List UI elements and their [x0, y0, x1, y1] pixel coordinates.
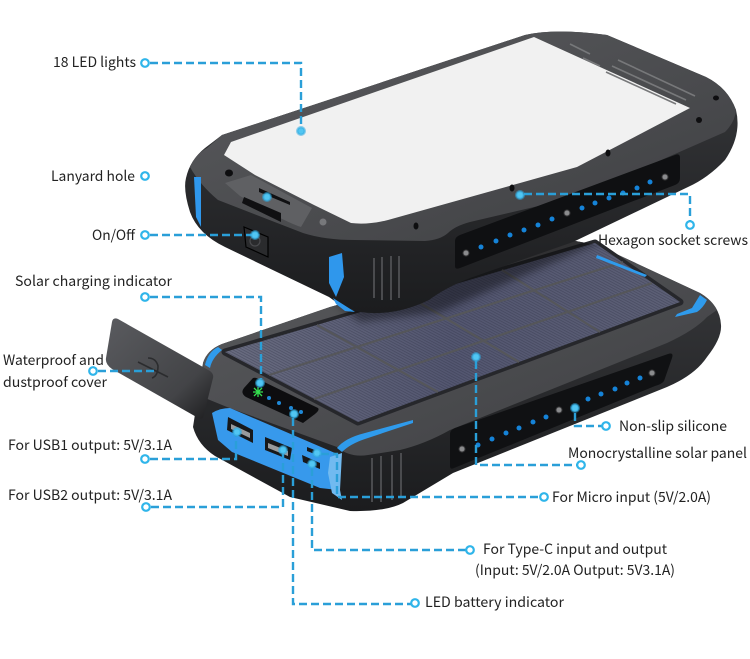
on/off button — [244, 227, 268, 257]
blue corner accents — [205, 255, 707, 452]
blue side accents — [194, 177, 355, 312]
callout: waterproof and dustproof cover — [3, 350, 157, 392]
LED display window — [242, 378, 319, 423]
callout: 18 LED lights: 18 LED lights — [53, 52, 136, 72]
hexagon socket screw holes — [225, 96, 719, 230]
USB symbol on flap — [138, 358, 168, 378]
solar indicator green light — [253, 387, 263, 397]
callout: non-slip silicone: Non-slip silicone — [619, 416, 727, 436]
lower body — [193, 240, 721, 511]
rating label printing — [570, 44, 695, 104]
callout: USB1 output: For USB1 output: 5V/3.1A — [8, 435, 172, 455]
callout: type-C input and output: (Input: 5V/2.0A Output: 5V3.1A) — [475, 560, 675, 580]
callout: waterproof and dustproof cover: Waterproof and — [3, 350, 104, 370]
callout: on/off — [92, 225, 259, 245]
waterproof cover flap — [106, 318, 213, 419]
callout: hexagon socket screws — [516, 191, 748, 250]
white LED light panel — [224, 37, 690, 224]
callout: solar charging indicator — [15, 271, 264, 387]
callout: type-C input and output — [308, 460, 675, 580]
lanyard hole — [242, 188, 290, 222]
upper bezel — [190, 32, 736, 241]
callout: 18 LED lights — [53, 52, 305, 135]
type-C port — [302, 455, 320, 469]
callout: hexagon socket screws: Hexagon socket screws — [598, 230, 748, 250]
side grip strip with blue dots — [450, 354, 672, 469]
callout: lanyard hole: Lanyard hole — [51, 166, 135, 186]
callout: micro input — [313, 449, 711, 507]
callout: micro input: For Micro input (5V/2.0A) — [552, 487, 711, 507]
lanyard hood — [225, 175, 312, 227]
callout: solar charging indicator: Solar charging indicator — [15, 271, 173, 291]
callout: LED battery indicator: LED battery indicator — [425, 592, 565, 612]
callout: USB2 output — [8, 446, 287, 511]
upper body — [185, 32, 738, 313]
callout: LED battery indicator — [290, 410, 565, 612]
side grip strip with blue dots — [455, 154, 680, 269]
callout: on/off: On/Off — [92, 225, 136, 245]
callout: lanyard hole — [51, 166, 271, 201]
micro USB port — [307, 447, 320, 456]
callout: monocrystalline solar panel — [472, 353, 747, 469]
lower top bezel — [203, 240, 717, 456]
product: upper power bank — [185, 32, 738, 313]
grip ribs — [374, 256, 399, 300]
grip ribs — [372, 453, 401, 502]
blue front strip — [328, 453, 342, 500]
blue port panel — [212, 408, 338, 490]
callout: non-slip silicone — [571, 404, 727, 436]
USB2 port — [265, 437, 292, 460]
USB1 port — [227, 417, 253, 443]
callout: USB1 output — [8, 428, 241, 463]
callout: type-C input and output: For Type-C input and output — [483, 539, 668, 559]
shadow cast by upper device — [336, 241, 599, 325]
callout: monocrystalline solar panel: Monocrystalline solar panel — [568, 443, 747, 463]
callout: waterproof and dustproof cover: dustproof cover — [3, 372, 108, 392]
solar panel — [225, 243, 680, 422]
callout: USB2 output: For USB2 output: 5V/3.1A — [8, 485, 172, 505]
product: lower solar power bank — [193, 240, 721, 511]
